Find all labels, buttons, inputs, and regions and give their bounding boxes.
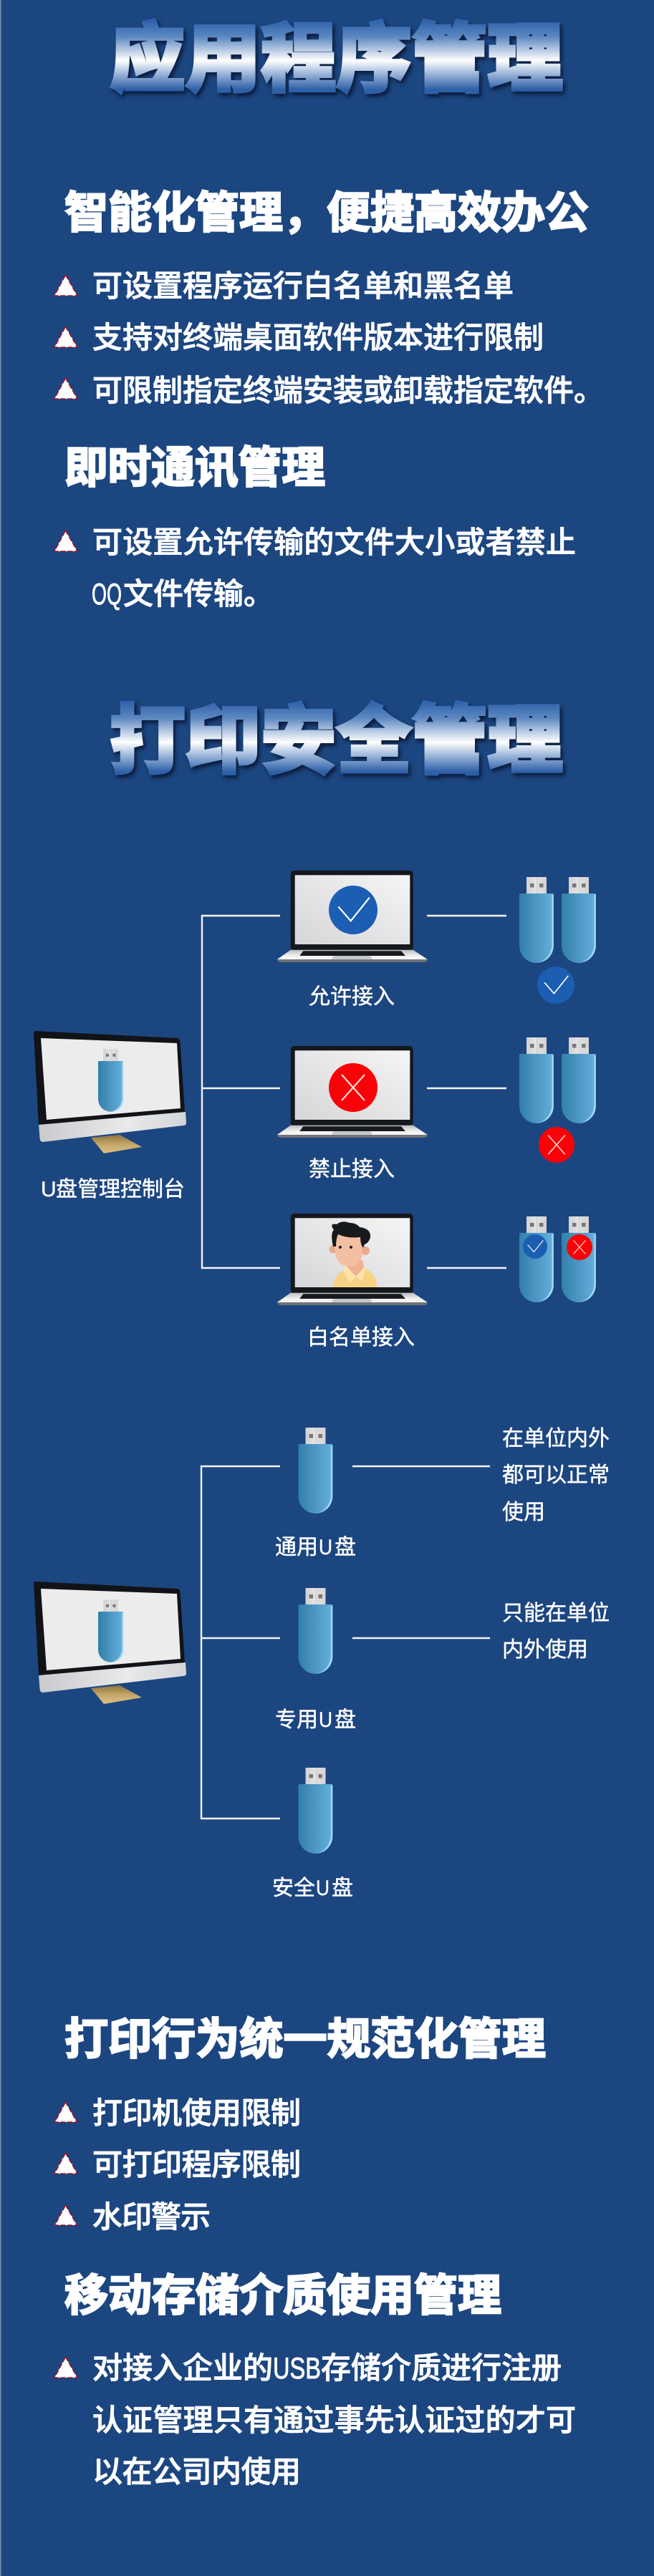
bullet list: print controls: 可打印程序限制	[92, 2148, 301, 2182]
description: general USB: 都可以正常	[502, 1463, 610, 1487]
label: secure USB: 盘	[332, 1877, 353, 1900]
heading: instant messaging: 即时通讯管理	[64, 443, 325, 492]
label: allowed: 允许接入	[309, 985, 395, 1009]
icon: general USB	[298, 1428, 332, 1514]
bullet: file transfer limits: OQ	[92, 577, 122, 611]
label: general USB: 盘	[335, 1536, 356, 1559]
description: dedicated USB: 内外使用	[502, 1638, 588, 1662]
icon: USB pair allowed	[519, 877, 596, 1004]
icon: laptop whitelist person	[277, 1214, 428, 1305]
label: general USB: U	[319, 1536, 332, 1559]
bullet: file transfer limits: 文件传输。	[123, 577, 274, 611]
heading: print behaviour: 打印行为统一规范化管理	[64, 2015, 546, 2063]
icon: dedicated USB	[298, 1588, 332, 1674]
bullet list: print controls: 水印警示	[92, 2200, 211, 2234]
connector lines	[201, 1466, 490, 1819]
label: whitelist: 白名单接入	[307, 1326, 415, 1350]
bullet list: print controls	[54, 2096, 301, 2234]
label: blocked: 禁止接入	[309, 1158, 395, 1181]
label: USB console: 盘管理控制台	[56, 1178, 185, 1201]
icon: secure USB	[298, 1768, 332, 1854]
icon: USB pair mixed	[519, 1216, 596, 1302]
heading: smart management: 智能化管理，便捷高效办公	[64, 188, 589, 237]
label: USB console: U	[41, 1178, 57, 1201]
description: general USB: 使用	[502, 1501, 545, 1524]
bullet: registration: 存储介质进行注册	[321, 2351, 562, 2385]
label: general USB: 通用	[275, 1536, 318, 1559]
description: dedicated USB: 只能在单位	[502, 1602, 610, 1625]
panel: print behaviour	[54, 2015, 546, 2234]
icon: laptop allowed	[277, 871, 428, 962]
bullet: file transfer limits: 可设置允许传输的文件大小或者禁止	[92, 526, 576, 559]
label: dedicated USB: U	[319, 1708, 332, 1732]
title: application management: 应用程序管理	[110, 18, 563, 102]
bullet: registration	[54, 2351, 576, 2489]
diagram: USB types	[34, 1427, 610, 1900]
title: print security management: 打印安全管理	[110, 699, 563, 783]
icon: console monitor	[34, 1582, 186, 1704]
diagram: USB access control	[34, 871, 596, 1350]
connector lines	[202, 916, 506, 1268]
description: general USB	[502, 1427, 610, 1524]
bullet: registration: USB	[273, 2351, 321, 2385]
description: general USB: 在单位内外	[502, 1427, 610, 1451]
bullet list: application controls: 可设置程序运行白名单和黑名单	[92, 269, 514, 303]
panel: instant messaging management	[54, 443, 576, 611]
bullet list: application controls: 支持对终端桌面软件版本进行限制	[92, 321, 544, 354]
panel: removable media	[54, 2271, 576, 2489]
panel: smart management	[54, 188, 604, 407]
description: dedicated USB	[502, 1602, 610, 1662]
label: secure USB: U	[316, 1877, 330, 1900]
bullet list: application controls	[54, 269, 604, 407]
bullet: file transfer limits	[54, 526, 576, 611]
bullet: registration: 认证管理只有通过事先认证过的才可	[92, 2403, 576, 2437]
heading: removable media: 移动存储介质使用管理	[64, 2271, 501, 2320]
bullet list: print controls: 打印机使用限制	[92, 2096, 301, 2130]
bullet: registration: 以在公司内使用	[92, 2455, 301, 2489]
label: dedicated USB: 盘	[335, 1708, 356, 1732]
label: secure USB: 安全	[272, 1877, 315, 1900]
label: dedicated USB: 专用	[275, 1708, 318, 1732]
icon: laptop blocked	[277, 1046, 428, 1138]
bullet list: application controls: 可限制指定终端安装或卸载指定软件。	[92, 374, 604, 407]
bullet: registration: 对接入企业的	[92, 2351, 273, 2385]
icon: USB pair blocked	[519, 1037, 596, 1163]
icon: management console monitor	[34, 1031, 186, 1153]
